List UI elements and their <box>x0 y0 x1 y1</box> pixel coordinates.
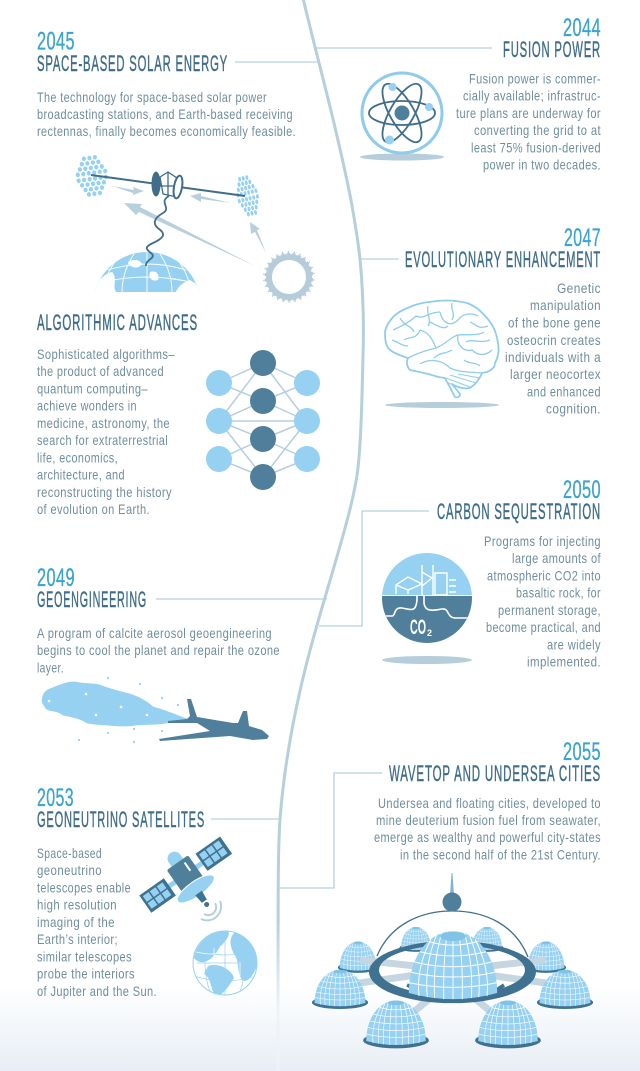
year: 2050 <box>563 476 601 504</box>
text block: Sophisticated algorithms– <box>37 346 175 362</box>
text block: cially available; infrastruc- <box>463 88 601 104</box>
panel: 2049 geoengineering: GEOENGINEERING <box>37 587 147 612</box>
heading: GEONEUTRINO SATELLITES <box>37 807 205 832</box>
text block: A program of calcite aerosol geoengineering <box>37 625 272 641</box>
text block <box>484 533 601 670</box>
text block: Space-based <box>37 845 102 861</box>
text block <box>37 89 296 139</box>
text block: begins to cool the planet and repair the ozone <box>37 642 280 658</box>
text block <box>374 795 601 862</box>
text block: similar telescopes <box>37 948 132 964</box>
central timeline curve <box>278 0 363 1071</box>
text block: rectennas, finally becomes economically feasible. <box>37 123 296 139</box>
panel: 2049 geoengineering <box>37 564 280 743</box>
year: 2044 <box>563 14 601 42</box>
panel: 2047 evolutionary enhancement <box>385 224 601 416</box>
text block: individuals with a <box>505 349 601 365</box>
label: CO2: 2 <box>427 628 432 638</box>
text block: search for extraterrestrial <box>37 432 168 448</box>
text block: Fusion power is commer- <box>469 70 601 86</box>
text block: large amounts of <box>512 550 601 566</box>
text block: The technology for space-based solar power <box>37 89 267 105</box>
text block: life, economics, <box>37 450 118 466</box>
panel: 2053 geoneutrino satellites <box>37 784 258 999</box>
text block: telescopes enable <box>37 880 131 896</box>
panel: 2045 space-based solar energy <box>37 32 315 303</box>
panel: 2055 wavetop and undersea cities <box>312 738 601 1048</box>
text block: cognition. <box>546 400 601 416</box>
panel: 2044 fusion power <box>360 14 601 172</box>
text block: become practical, and <box>486 619 601 635</box>
year: 2045 <box>37 28 75 56</box>
icon: brain <box>385 300 499 408</box>
text block: achieve wonders in <box>37 398 137 414</box>
icon: carbon storage <box>380 550 475 664</box>
icon: earth <box>193 930 258 996</box>
text block: basaltic rock, for <box>516 585 601 601</box>
text block: layer. <box>37 660 64 676</box>
panel: 2050 carbon sequestration <box>380 476 601 670</box>
text block: implemented. <box>527 654 601 670</box>
text block: quantum computing– <box>37 380 148 396</box>
text block <box>37 346 175 517</box>
chart: neural network <box>206 350 320 490</box>
text block: are widely <box>547 636 601 652</box>
connector lines <box>156 48 492 888</box>
text block: least 75% fusion-derived <box>471 139 601 155</box>
text block: high resolution <box>37 897 117 913</box>
text block <box>37 845 157 999</box>
text block: the product of advanced <box>37 363 164 379</box>
text block: broadcasting stations, and Earth-based receiving <box>37 106 293 122</box>
text block <box>37 625 280 676</box>
text block: and enhanced <box>527 384 601 400</box>
page background fade <box>0 985 640 1071</box>
text block: permanent storage, <box>498 602 601 618</box>
text block: power in two decades. <box>483 156 601 172</box>
illustration: solar satellite, sun and earth <box>76 155 315 303</box>
text block <box>456 70 601 172</box>
text block: of Jupiter and the Sun. <box>37 983 157 999</box>
label: CO2: CO <box>410 616 426 639</box>
heading: ALGORITHMIC ADVANCES <box>37 310 198 335</box>
text block: larger neocortex <box>510 366 601 382</box>
text block: of evolution on Earth. <box>37 501 150 517</box>
label: CO2 <box>410 616 432 639</box>
text block: converting the grid to at <box>474 122 601 138</box>
icon: atom <box>360 73 444 160</box>
text block: Genetic <box>557 280 601 296</box>
text block: probe the interiors <box>37 966 135 982</box>
text block <box>505 280 601 416</box>
icon: satellite <box>130 824 249 935</box>
illustration: plane spraying aerosol <box>43 677 269 743</box>
text block: osteocrin creates <box>507 332 601 348</box>
text block: imaging of the <box>37 914 115 930</box>
text block: medicine, astronomy, the <box>37 415 170 431</box>
text block: architecture, and <box>37 467 125 483</box>
text block: reconstructing the history <box>37 484 172 500</box>
year: 2053 <box>37 784 74 812</box>
illustration: domed city <box>312 873 593 1048</box>
text block: geoneutrino <box>37 862 102 878</box>
text block: manipulation <box>530 297 601 313</box>
text block: ture plans are underway for <box>456 105 601 121</box>
text block: Earth’s interior; <box>37 931 118 947</box>
year: 2047 <box>564 224 601 252</box>
text block: atmospheric CO2 into <box>487 568 601 584</box>
text block: of the bone gene <box>508 314 601 330</box>
heading: SPACE-BASED SOLAR ENERGY <box>37 51 228 76</box>
panel: algorithmic advances <box>37 310 320 517</box>
text block: Programs for injecting <box>484 533 601 549</box>
year: 2049 <box>37 564 75 592</box>
year: 2055 <box>563 738 601 766</box>
